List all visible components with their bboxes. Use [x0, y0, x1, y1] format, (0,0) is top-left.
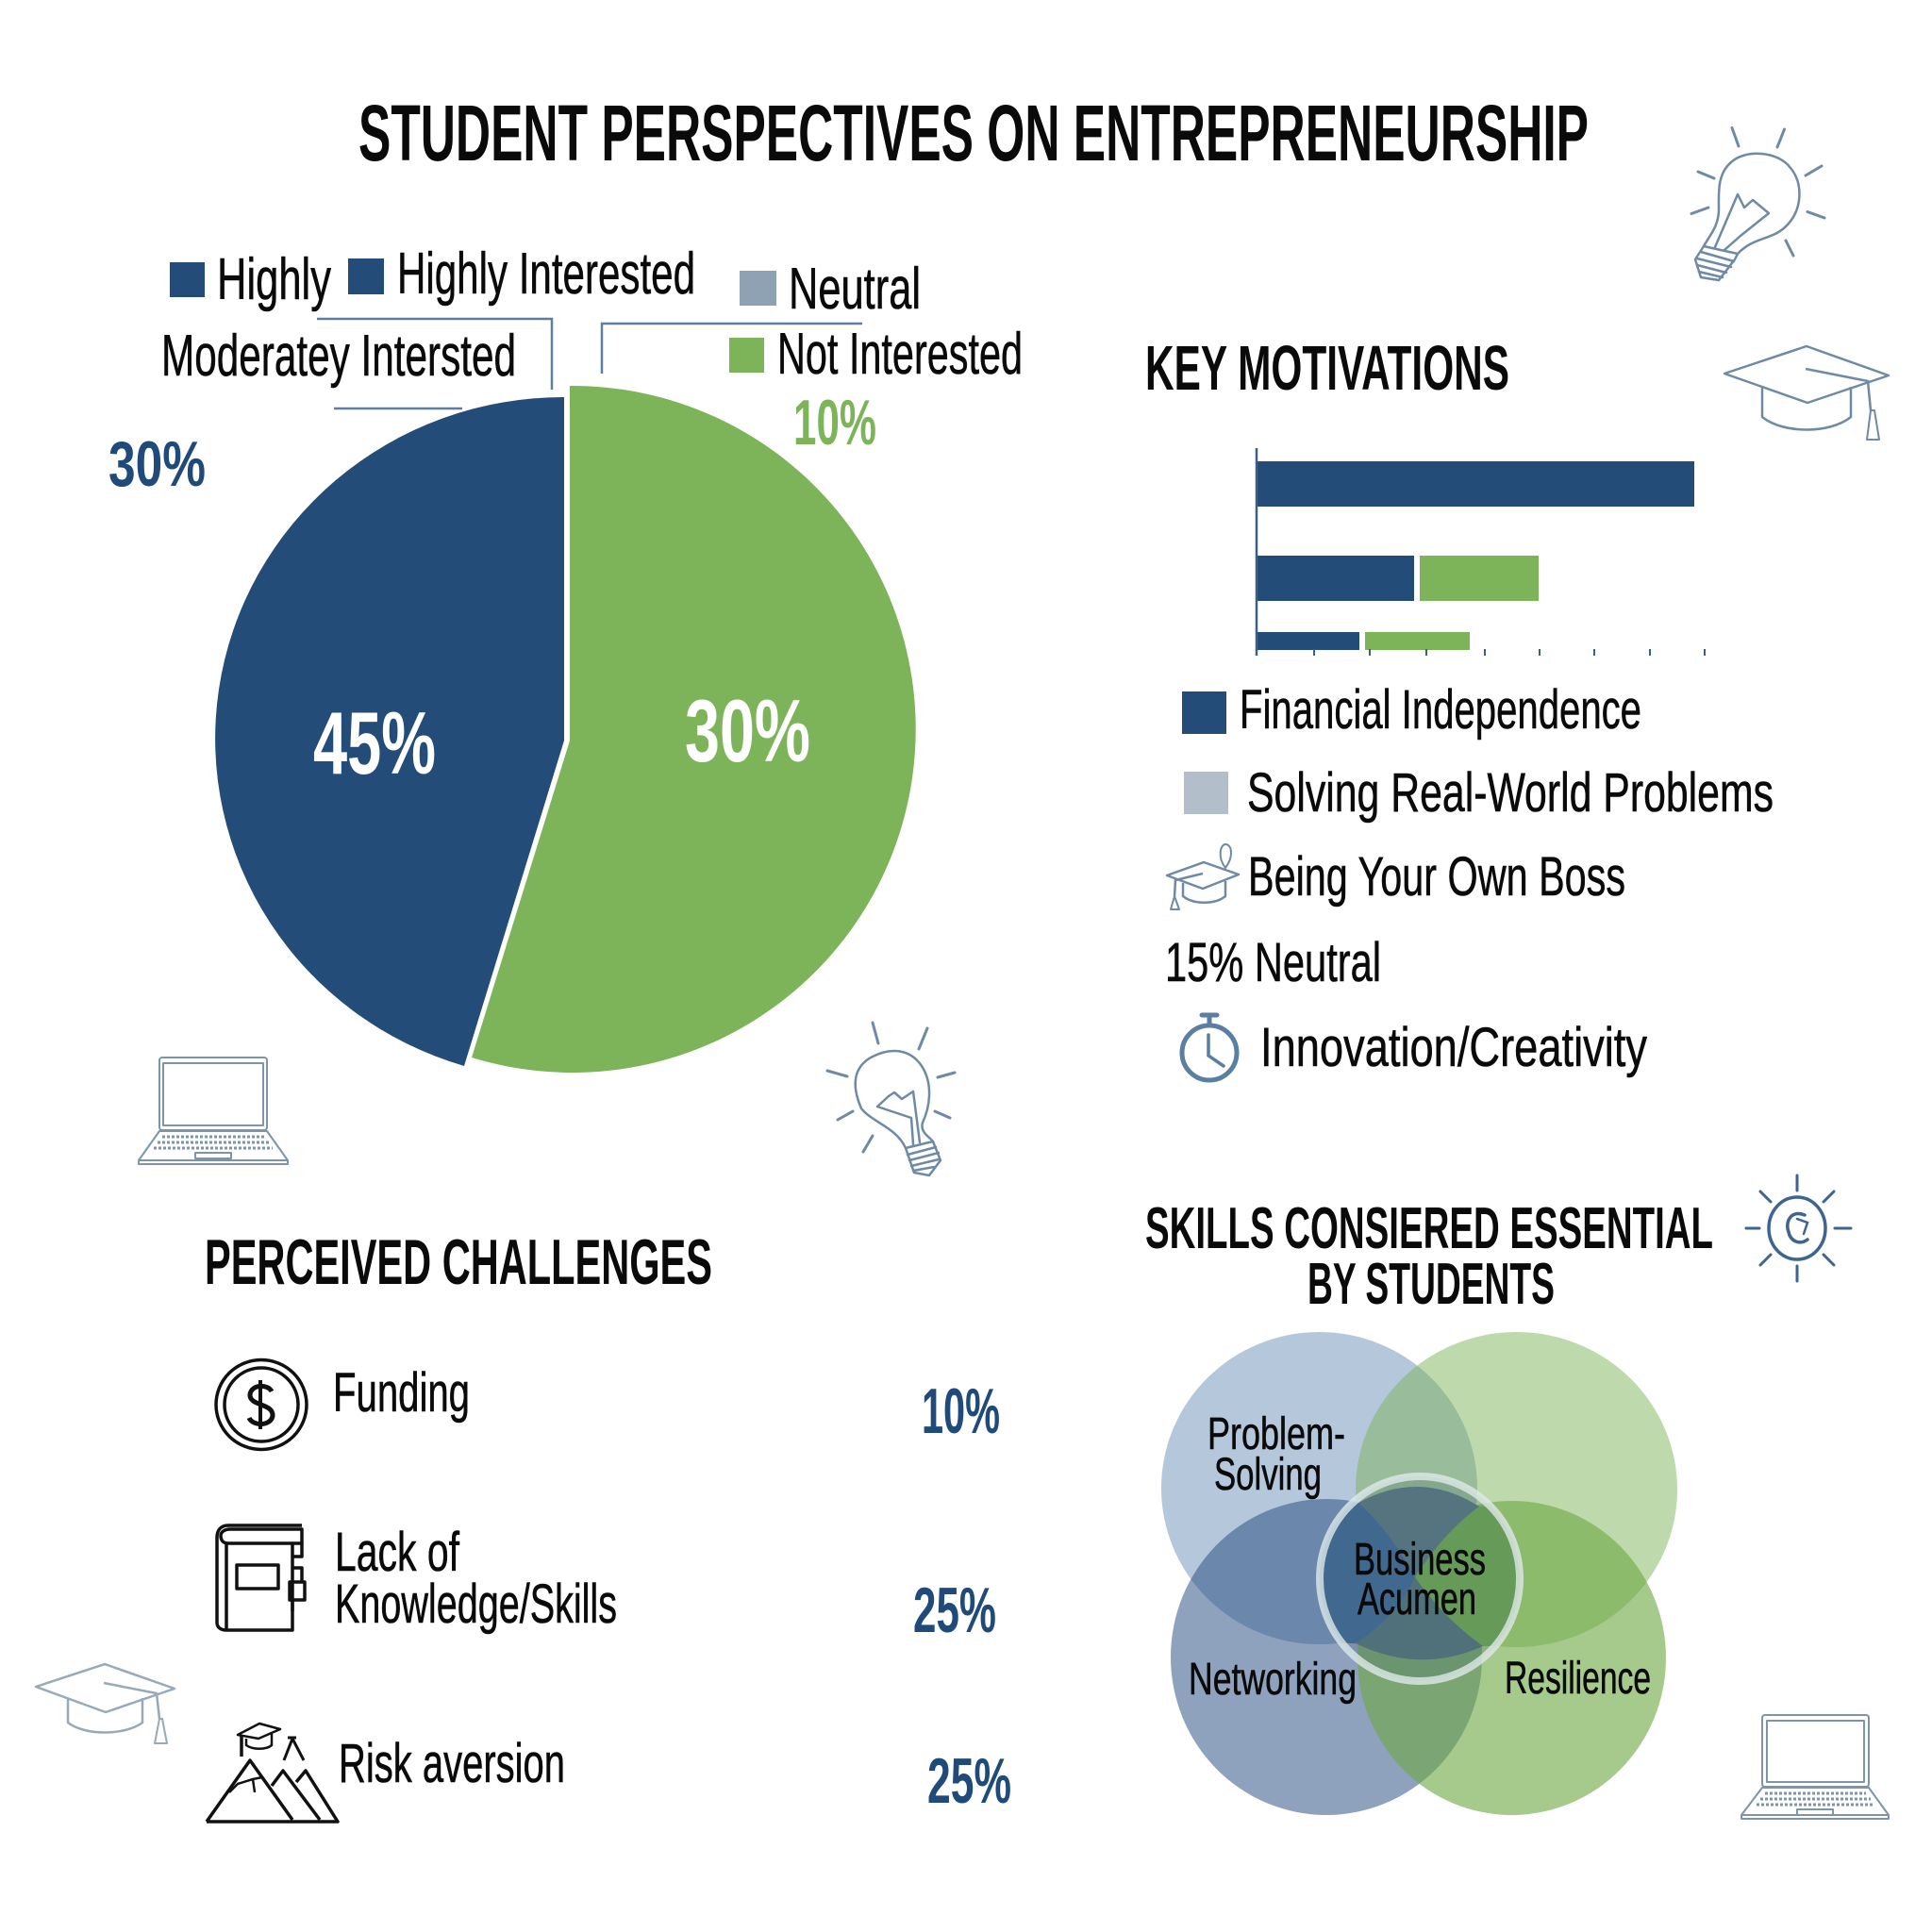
heading: KEY MOTIVATIONS — [1145, 333, 1509, 404]
panel: perceived challenges — [205, 1226, 1011, 1822]
item: risk aversion: Risk aversion — [339, 1733, 565, 1794]
label: problem-solving: Solving — [1214, 1450, 1322, 1500]
label: business acumen: Business — [1354, 1535, 1486, 1585]
item: funding: Funding — [333, 1362, 470, 1424]
motivation legend: Innovation/Creativity — [1260, 1017, 1647, 1078]
icon: light bulb top right — [1691, 128, 1824, 280]
pie slice: green — [472, 386, 916, 1073]
icon: dollar coin — [216, 1360, 307, 1449]
value: risk aversion: 25% — [927, 1745, 1011, 1817]
icon: mountain — [207, 1724, 338, 1822]
venn diagram — [1161, 1332, 1677, 1815]
icon: book — [217, 1525, 305, 1630]
legend: interest levels — [161, 242, 1023, 389]
item: lack of knowledge: Lack of — [335, 1522, 460, 1583]
motivation legend: 15% Neutral — [1165, 932, 1381, 993]
label: business acumen — [1354, 1535, 1486, 1624]
outside label 10%: 10% — [793, 387, 876, 458]
value: funding: 10% — [922, 1375, 1000, 1447]
label: business acumen: Acumen — [1357, 1574, 1476, 1624]
label: networking: Networking — [1189, 1655, 1357, 1705]
label: problem-solving: Problem- — [1208, 1409, 1345, 1459]
legend: interest levels: Highly Interested — [397, 242, 695, 307]
heading: BY STUDENTS — [1307, 1252, 1555, 1317]
item: lack of knowledge — [335, 1522, 617, 1635]
icon: sun gear — [1746, 1175, 1851, 1281]
panel: key motivations — [1145, 333, 1774, 1080]
item: lack of knowledge: Knowledge/Skills — [335, 1574, 617, 1635]
legend: interest levels: Neutral — [789, 257, 921, 322]
icon: laptop left — [139, 1058, 288, 1164]
outside label 30%: 30% — [108, 428, 206, 500]
icon: graduation cap top right — [1724, 346, 1889, 440]
icon: light bulb center — [827, 1023, 955, 1175]
legend: interest levels: Not Interested — [777, 322, 1023, 387]
heading: PERCEIVED CHALLENGES — [205, 1226, 712, 1298]
leader lines — [317, 319, 862, 408]
label: resilience: Resilience — [1505, 1654, 1651, 1704]
heading — [1145, 1196, 1713, 1317]
motivation legend: Being Your Own Boss — [1248, 846, 1625, 908]
value: knowledge: 25% — [913, 1574, 996, 1646]
bar chart — [1257, 448, 1705, 656]
legend: interest levels: Highly — [217, 247, 331, 312]
pie label 45%: 45% — [313, 693, 436, 792]
label: problem-solving — [1208, 1409, 1345, 1500]
motivation legend — [1165, 679, 1774, 1080]
pie label 30%: 30% — [685, 681, 810, 780]
pie slice: blue — [215, 397, 564, 1066]
icon: laptop right — [1741, 1715, 1889, 1819]
legend: interest levels: Moderatey Intersted — [161, 324, 516, 389]
panel: skills venn — [1145, 1196, 1713, 1815]
motivation legend: Financial Independence — [1240, 679, 1641, 741]
panel: interest pie chart — [108, 242, 1023, 1073]
icon: graduation cap bottom left — [36, 1664, 175, 1743]
